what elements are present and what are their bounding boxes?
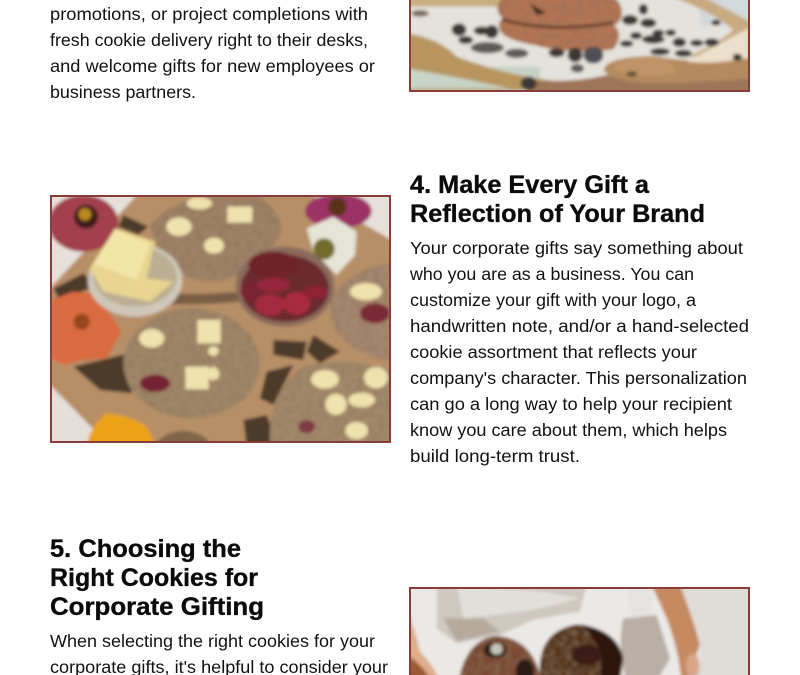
text block: section 5 paragraph: When selecting the right cookies for your <box>50 631 375 651</box>
text block: section 4 paragraph: cookie assortment that reflects your <box>410 342 697 362</box>
text block: section 4 paragraph: who you are as a business. You can <box>409 264 694 284</box>
text block: section 4 paragraph: customize your gift with your logo, a <box>410 290 696 310</box>
text block: section 3 closing paragraph: fresh cookie delivery right to their desks, <box>50 30 368 50</box>
text block: section 4 paragraph: build long-term trust. <box>410 446 580 466</box>
text block: section 4 paragraph: can go a long way to help your recipient <box>410 394 732 414</box>
text block: section 4 paragraph: company's character. This personalization <box>410 368 747 388</box>
text block: section 3 closing paragraph: promotions, or project completions with <box>50 4 368 24</box>
text block: section 4 paragraph: Your corporate gifts say something about <box>410 238 743 258</box>
image: chocolate cookies held on parchment <box>407 583 753 675</box>
heading: section 4: Reflection of Your Brand <box>410 200 705 228</box>
heading: section 5: 5. Choosing the <box>50 535 241 563</box>
heading: section 5: Right Cookies for <box>50 564 258 592</box>
text block: section 4 paragraph: handwritten note, and/or a hand-selected <box>410 316 749 336</box>
heading: section 5 <box>50 535 264 621</box>
heading: section 5: Corporate Gifting <box>50 593 264 621</box>
image: white chocolate raspberry cookies with flowers <box>47 192 395 447</box>
text block: section 5 paragraph <box>50 631 388 675</box>
text block: section 4 paragraph <box>409 238 749 466</box>
text block: section 4 paragraph: know you care about them, which helps <box>410 420 727 440</box>
heading: section 4: 4. Make Every Gift a <box>410 171 650 199</box>
image: stacked chocolate chip cookies <box>407 0 753 93</box>
text block: section 3 closing paragraph: and welcome gifts for new employees or <box>50 56 375 76</box>
text block: section 3 closing paragraph <box>50 4 375 102</box>
heading: section 4 <box>410 171 705 228</box>
text block: section 3 closing paragraph: business partners. <box>50 82 196 102</box>
